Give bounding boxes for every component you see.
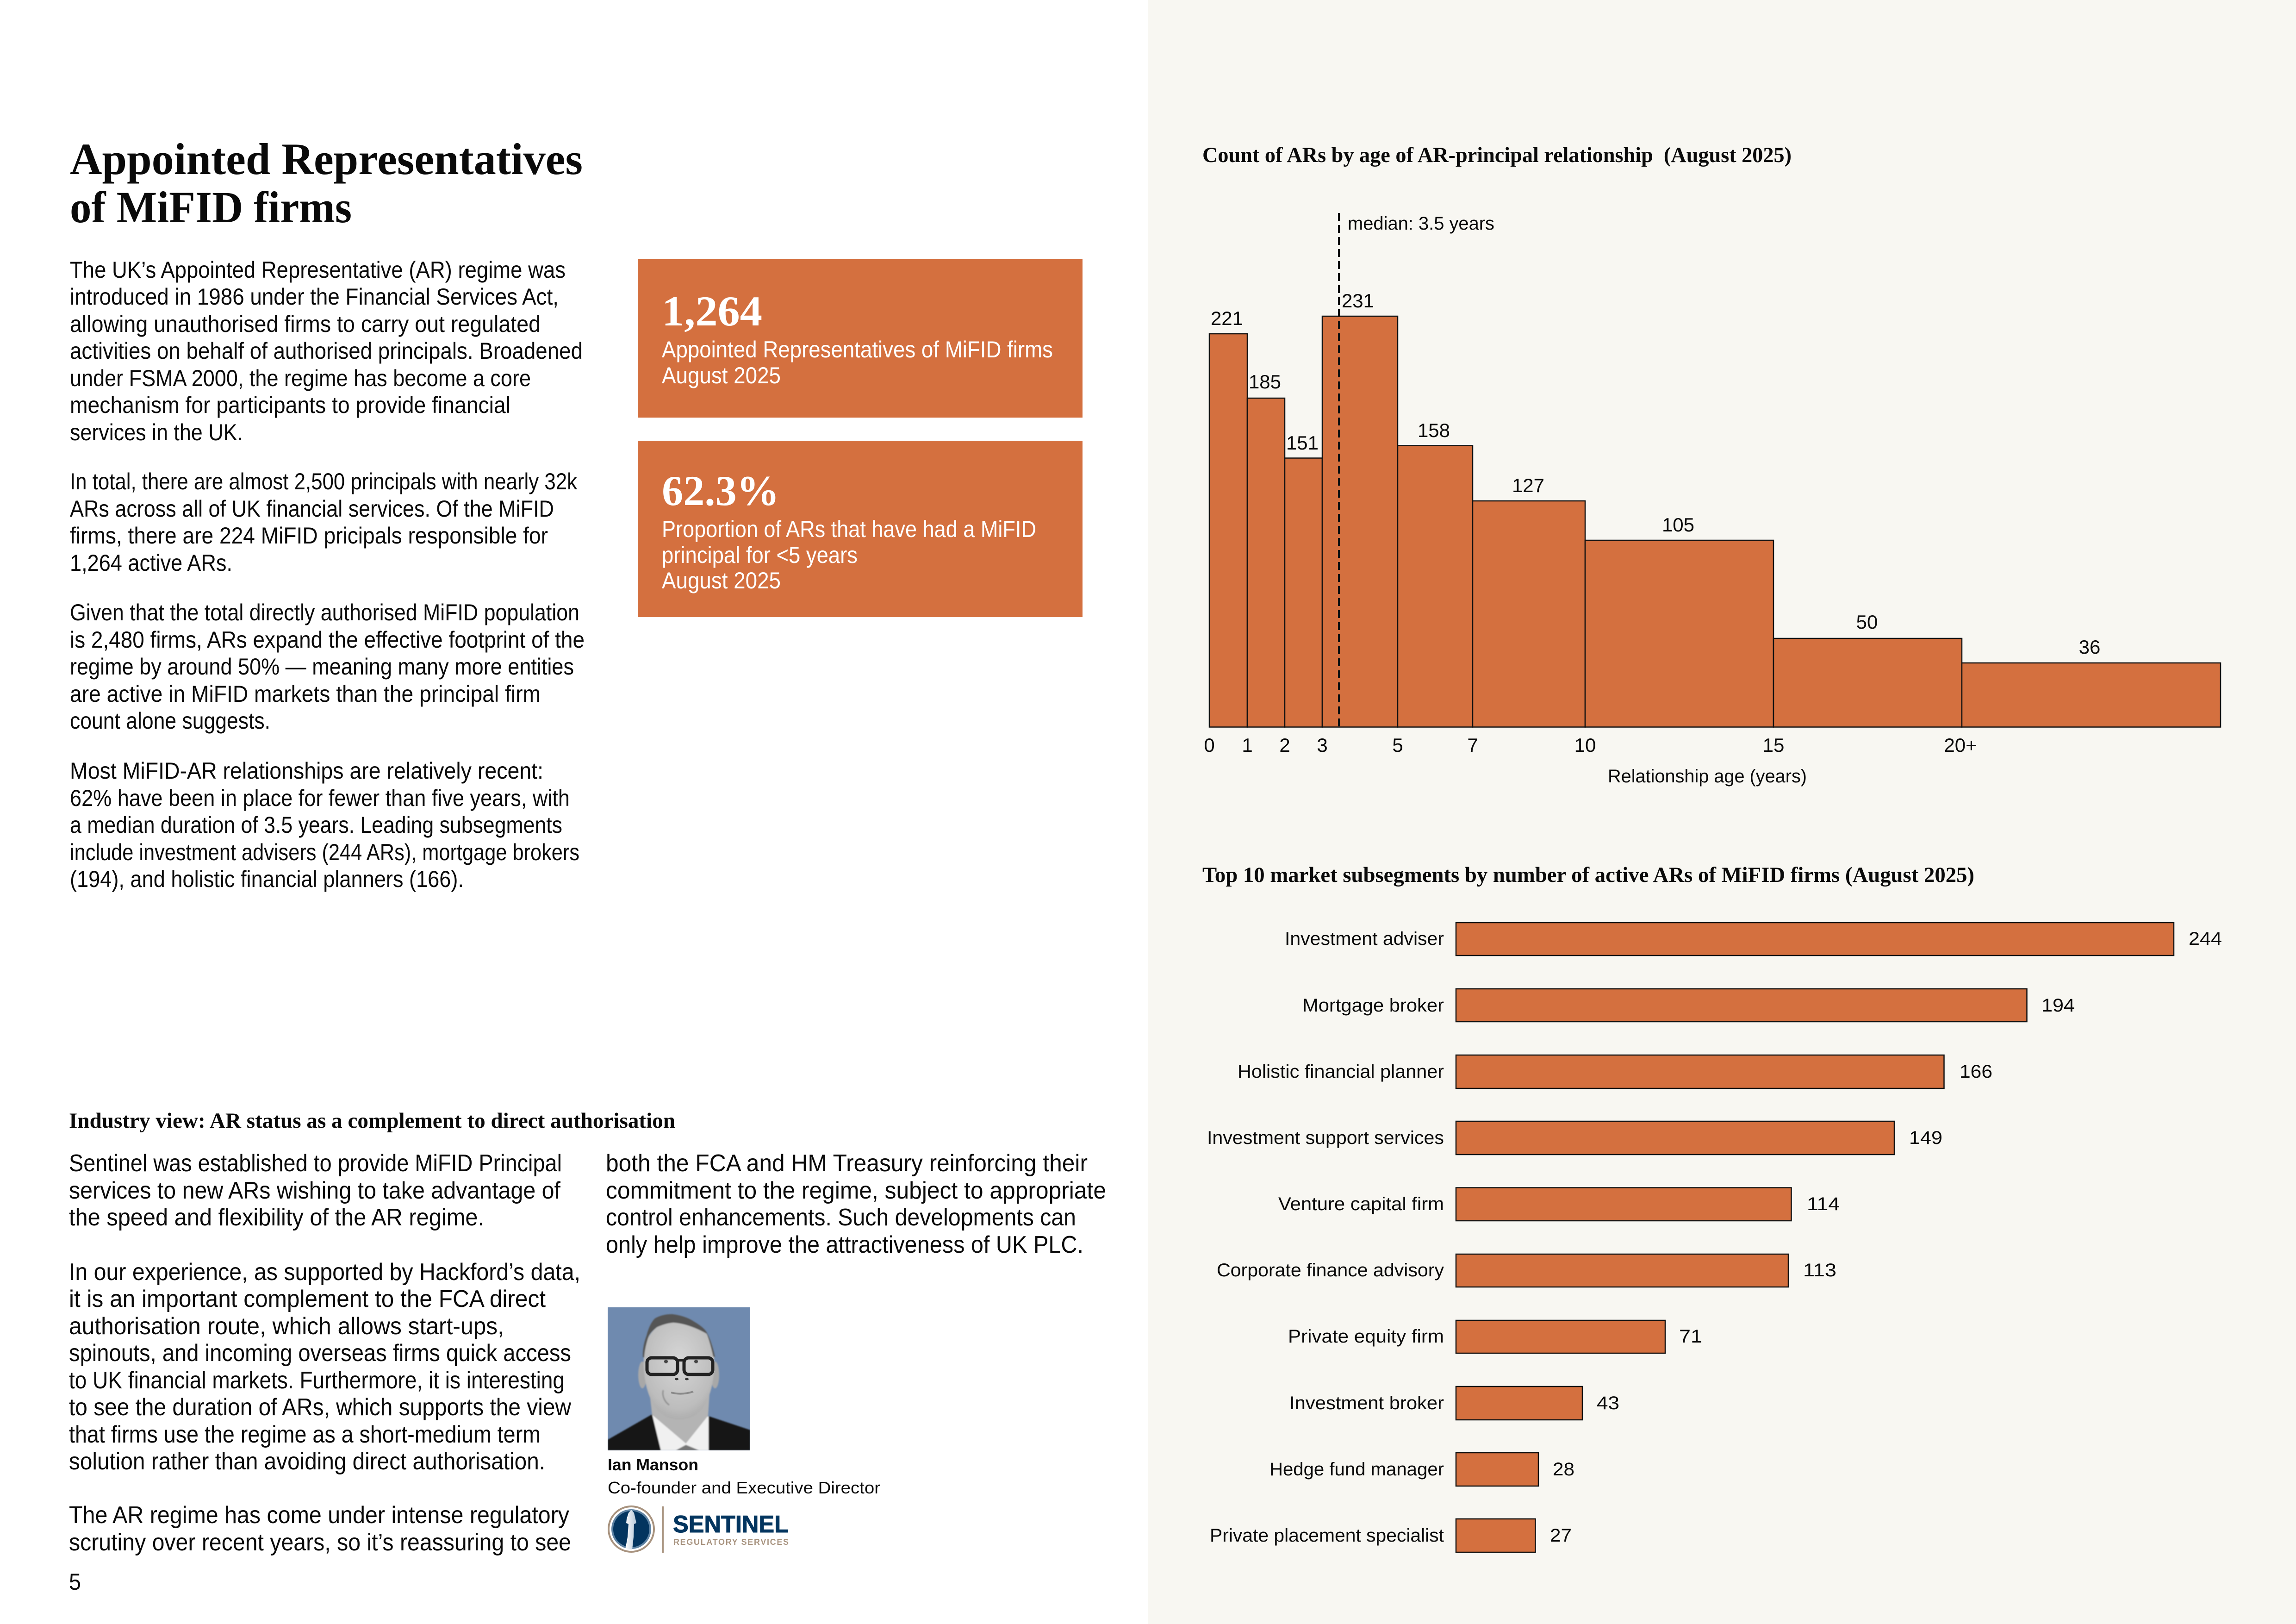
text block: footprint: is 2,480 firms, ARs expand the effective footprint of the	[70, 627, 585, 653]
callout: 62.3%: 62.3%	[662, 467, 779, 514]
text block: introduction: under FSMA 2000, the regime has become a core	[70, 365, 531, 391]
text block: introduction: mechanism for participants to provide financial	[70, 392, 510, 418]
bar value labels	[1211, 290, 2100, 658]
x axis tick labels: 1	[1242, 734, 1253, 756]
text block: population of principals: 1,264 active ARs.	[70, 550, 232, 576]
bar value labels: 50	[1856, 611, 1878, 633]
row: Private equity firm: 71	[1679, 1326, 1702, 1347]
row: Investment broker	[1289, 1387, 1619, 1420]
text block: introduction: introduced in 1986 under the Financial Services Act,	[70, 284, 559, 310]
bar value labels: 127	[1512, 475, 1544, 496]
callout: 1,264	[638, 259, 1083, 418]
x axis tick labels: 5	[1392, 734, 1403, 756]
title	[70, 134, 583, 232]
text block: industry view left column: The AR regime has come under intense regulatory	[69, 1502, 569, 1529]
row: Private placement specialist: Private placement specialist	[1210, 1525, 1444, 1546]
bar value labels: 158	[1418, 419, 1450, 441]
bar: 1 to 2 years	[1247, 398, 1285, 727]
logo: Sentinel Regulatory Services: SENTINEL	[673, 1511, 789, 1538]
bar: 20+ years	[1962, 663, 2221, 727]
bar: 7 to 10 years	[1473, 501, 1585, 727]
logo: Sentinel Regulatory Services	[609, 1506, 789, 1553]
callout: 1,264: Appointed Representatives of MiFID firms	[662, 337, 1053, 362]
text block: industry view right column	[606, 1150, 1106, 1258]
text block: footprint: regime by around 50% — meaning many more entities	[70, 654, 574, 680]
row: Mortgage broker	[1302, 989, 2075, 1022]
row: Venture capital firm	[1278, 1188, 1840, 1221]
text block: introduction: The UK’s Appointed Representative (AR) regime was	[70, 257, 566, 283]
text block: relationship age	[70, 758, 579, 892]
title: Appointed Representatives	[70, 134, 583, 184]
text block: footprint: are active in MiFID markets than the principal firm	[70, 681, 541, 707]
heading: subsegments chart: Top 10 market subsegments by number of active ARs of MiFID firms (August 2025)	[1202, 863, 1974, 887]
text block: footprint	[70, 600, 585, 734]
text block: footprint: count alone suggests.	[70, 708, 270, 734]
row: Hedge fund manager: Hedge fund manager	[1269, 1459, 1444, 1480]
text block: relationship age: Most MiFID-AR relationships are relatively recent:	[70, 758, 543, 784]
row: Private equity firm	[1288, 1320, 1702, 1353]
callout: 62.3%	[638, 441, 1083, 617]
bar: 15 to 20 years	[1773, 638, 1962, 727]
row: Investment adviser: Investment adviser	[1285, 929, 1444, 949]
bar value labels: 221	[1211, 307, 1243, 329]
portrait: Ian Manson	[608, 1307, 750, 1450]
row: Corporate finance advisory	[1217, 1254, 1836, 1287]
text block: industry view right column: control enhancements. Such developments can	[606, 1204, 1076, 1231]
page number: 5	[69, 1569, 81, 1595]
row: Investment support services: Investment support services	[1207, 1128, 1444, 1148]
x axis tick labels: 10	[1574, 734, 1596, 756]
title: of MiFID firms	[70, 182, 352, 232]
text block: industry view right column: only help improve the attractiveness of UK PLC.	[606, 1231, 1083, 1258]
text block: introduction	[70, 257, 583, 445]
bar value labels: 36	[2079, 636, 2100, 658]
text block: industry view left column: the speed and flexibility of the AR regime.	[69, 1204, 484, 1231]
row: Private equity firm: Private equity firm	[1288, 1326, 1444, 1347]
text block: relationship age: (194), and holistic financial planners (166).	[70, 866, 464, 892]
callout: 62.3%: Proportion of ARs that have had a MiFID	[662, 516, 1036, 542]
row: Venture capital firm: 114	[1807, 1194, 1840, 1214]
logo: Sentinel Regulatory Services: REGULATORY SERVICES	[673, 1537, 789, 1547]
text block: industry view left column: that firms use the regime as a short-medium term	[69, 1421, 541, 1448]
bar: 3 to 5 years	[1322, 316, 1398, 727]
row: Mortgage broker: 194	[2041, 995, 2075, 1016]
text block: population of principals: firms, there are 224 MiFID pricipals responsible for	[70, 523, 548, 549]
caption: name: Ian Manson	[608, 1456, 698, 1474]
text block: population of principals	[70, 468, 578, 576]
text block: industry view left column: to see the duration of ARs, which supports the view	[69, 1394, 571, 1421]
x axis tick labels: 3	[1317, 734, 1328, 756]
bar value labels: 151	[1286, 432, 1319, 454]
text block: introduction: allowing unauthorised firms to carry out regulated	[70, 311, 541, 337]
text block: industry view left column: spinouts, and incoming overseas firms quick access	[69, 1340, 571, 1367]
row: Holistic financial planner: 166	[1960, 1062, 1992, 1082]
text block: introduction: services in the UK.	[70, 419, 243, 445]
panel: right charts background	[1148, 0, 2296, 1624]
row: Mortgage broker: Mortgage broker	[1302, 995, 1444, 1016]
row: Private placement specialist: 27	[1550, 1525, 1572, 1546]
bar: 10 to 15 years	[1585, 540, 1773, 727]
text block: industry view left column: Sentinel was established to provide MiFID Principal	[69, 1150, 562, 1177]
text block: industry view left column: solution rather than avoiding direct authorisation.	[69, 1448, 545, 1475]
row: Investment support services	[1207, 1121, 1942, 1155]
text block: population of principals: In total, there are almost 2,500 principals with nearly 32k	[70, 468, 578, 494]
heading: histogram: Count of ARs by age of AR-principal relationship (August 2025)	[1202, 143, 1792, 167]
bar: 0 to 1 years	[1209, 334, 1247, 727]
bar: 5 to 7 years	[1398, 445, 1473, 727]
bar value labels: 231	[1342, 290, 1374, 312]
row: Investment adviser: 244	[2189, 929, 2222, 949]
row: Holistic financial planner	[1238, 1055, 1992, 1088]
row: Venture capital firm: Venture capital firm	[1278, 1194, 1444, 1214]
text block: industry view left column: it is an important complement to the FCA direct	[69, 1286, 546, 1312]
callout: 1,264: 1,264	[662, 287, 762, 335]
text block: industry view left column	[69, 1150, 580, 1556]
row: Private placement specialist	[1210, 1519, 1572, 1552]
row: Investment adviser	[1285, 923, 2222, 956]
text block: introduction: activities on behalf of authorised principals. Broadened	[70, 338, 583, 364]
text block: relationship age: 62% have been in place for fewer than five years, with	[70, 785, 570, 811]
text block: industry view left column: to UK financial markets. Furthermore, it is interesting	[69, 1367, 565, 1394]
x axis tick labels: 0	[1204, 734, 1215, 756]
text block: industry view left column: scrutiny over recent years, so it’s reassuring to see	[69, 1529, 571, 1556]
text block: industry view left column: In our experience, as supported by Hackford’s data,	[69, 1259, 580, 1286]
x axis tick labels: 7	[1467, 734, 1478, 756]
row: Investment broker: Investment broker	[1289, 1393, 1444, 1413]
callout: 62.3%: August 2025	[662, 568, 781, 593]
x axis tick labels: 20+	[1944, 734, 1977, 756]
chart: top 10 market subsegments	[1207, 923, 2222, 1552]
text block: footprint: Given that the total directly authorised MiFID population	[70, 600, 579, 625]
x axis tick labels: 2	[1279, 734, 1290, 756]
x axis tick labels	[1204, 734, 1977, 756]
heading: industry view: Industry view: AR status as a complement to direct authorisation	[69, 1109, 675, 1133]
row: Investment support services: 149	[1909, 1128, 1942, 1148]
x axis title: Relationship age (years)	[1608, 766, 1807, 787]
chart: relationship age histogram	[1204, 213, 2221, 787]
row: Investment broker: 43	[1597, 1393, 1619, 1413]
text block: industry view right column: commitment to the regime, subject to appropriate	[606, 1177, 1106, 1204]
row: Holistic financial planner: Holistic financial planner	[1238, 1062, 1444, 1082]
text block: industry view left column: authorisation route, which allows start-ups,	[69, 1313, 504, 1340]
text block: relationship age: a median duration of 3.5 years. Leading subsegments	[70, 812, 562, 838]
row: Corporate finance advisory: 113	[1803, 1260, 1836, 1280]
row: Hedge fund manager	[1269, 1453, 1574, 1486]
text block: population of principals: ARs across all of UK financial services. Of the MiFID	[70, 496, 554, 522]
median label: median: 3.5 years	[1348, 213, 1494, 234]
callout: 1,264: August 2025	[662, 362, 781, 388]
row: Corporate finance advisory: Corporate finance advisory	[1217, 1260, 1444, 1280]
row: Hedge fund manager: 28	[1553, 1459, 1574, 1480]
callout: 62.3%: principal for <5 years	[662, 542, 858, 568]
text block: industry view right column: both the FCA and HM Treasury reinforcing their	[606, 1150, 1088, 1177]
caption: role: Co-founder and Executive Director	[608, 1478, 880, 1497]
median marker	[1338, 213, 1340, 727]
text block: industry view left column: services to new ARs wishing to take advantage of	[69, 1177, 561, 1204]
x axis tick labels: 15	[1763, 734, 1784, 756]
bar value labels: 105	[1662, 514, 1694, 536]
bar: 2 to 3 years	[1285, 458, 1322, 727]
text block: relationship age: include investment advisers (244 ARs), mortgage brokers	[70, 839, 579, 865]
bar value labels: 185	[1249, 371, 1281, 393]
